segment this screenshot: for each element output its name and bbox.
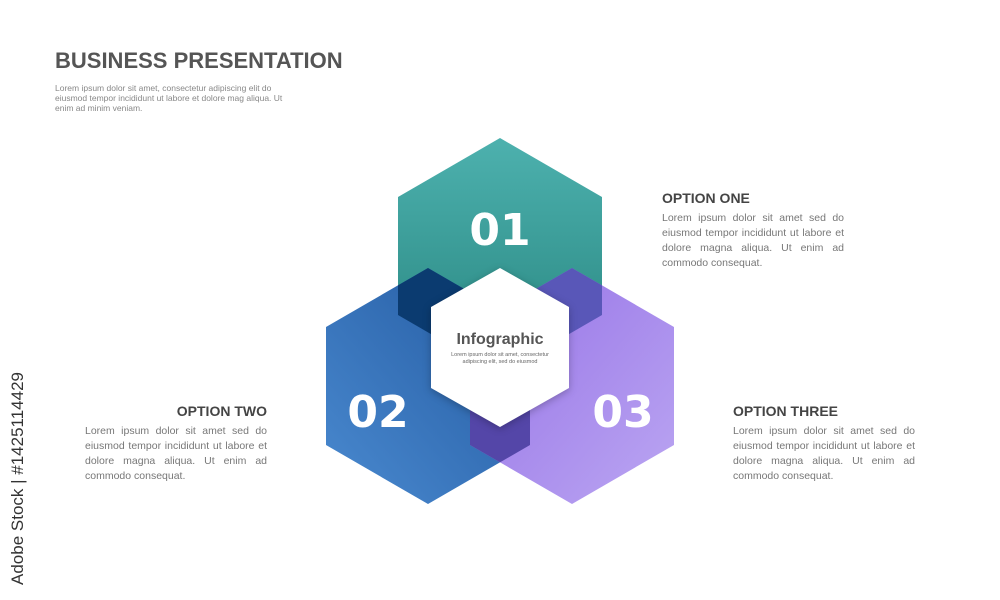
option two: Lorem ipsum dolor sit amet sed do eiusmod tempor incididunt ut labore et dolore magna aliqua. Ut enim ad commodo consequat. — [85, 425, 267, 482]
watermark side text: Adobe Stock | #1425114429 — [8, 372, 27, 585]
center hexagon — [431, 268, 569, 427]
center hexagon: Lorem ipsum dolor sit amet, consectetur — [451, 352, 549, 358]
option one: Lorem ipsum dolor sit amet sed do eiusmod tempor incididunt ut labore et dolore magna aliqua. Ut enim ad commodo consequat. — [662, 212, 844, 269]
hexagon 03 — [470, 268, 674, 504]
hexagon 02: 02 — [347, 387, 409, 438]
option one: OPTION ONE — [662, 190, 750, 206]
hexagon 01 — [398, 138, 602, 374]
hexagon diagram — [326, 138, 674, 504]
option two: OPTION TWO — [177, 403, 267, 419]
title: BUSINESS PRESENTATION — [55, 48, 343, 73]
hexagon 02 — [326, 268, 530, 504]
hexagon 03: 03 — [592, 387, 654, 438]
option three: Lorem ipsum dolor sit amet sed do eiusmod tempor incididunt ut labore et dolore magna aliqua. Ut enim ad commodo consequat. — [733, 425, 915, 482]
hexagon 01: 01 — [469, 205, 531, 256]
center hexagon: adipiscing elit, sed do eiusmod — [463, 359, 537, 365]
overlaps — [398, 268, 602, 462]
center hexagon: Infographic — [456, 331, 544, 348]
subtitle text: Lorem ipsum dolor sit amet, consectetur adipiscing elit do eiusmod tempor incididunt ut labore et dolore mag aliqua. Ut enim ad minim veniam. — [55, 83, 282, 113]
option three: OPTION THREE — [733, 403, 838, 419]
